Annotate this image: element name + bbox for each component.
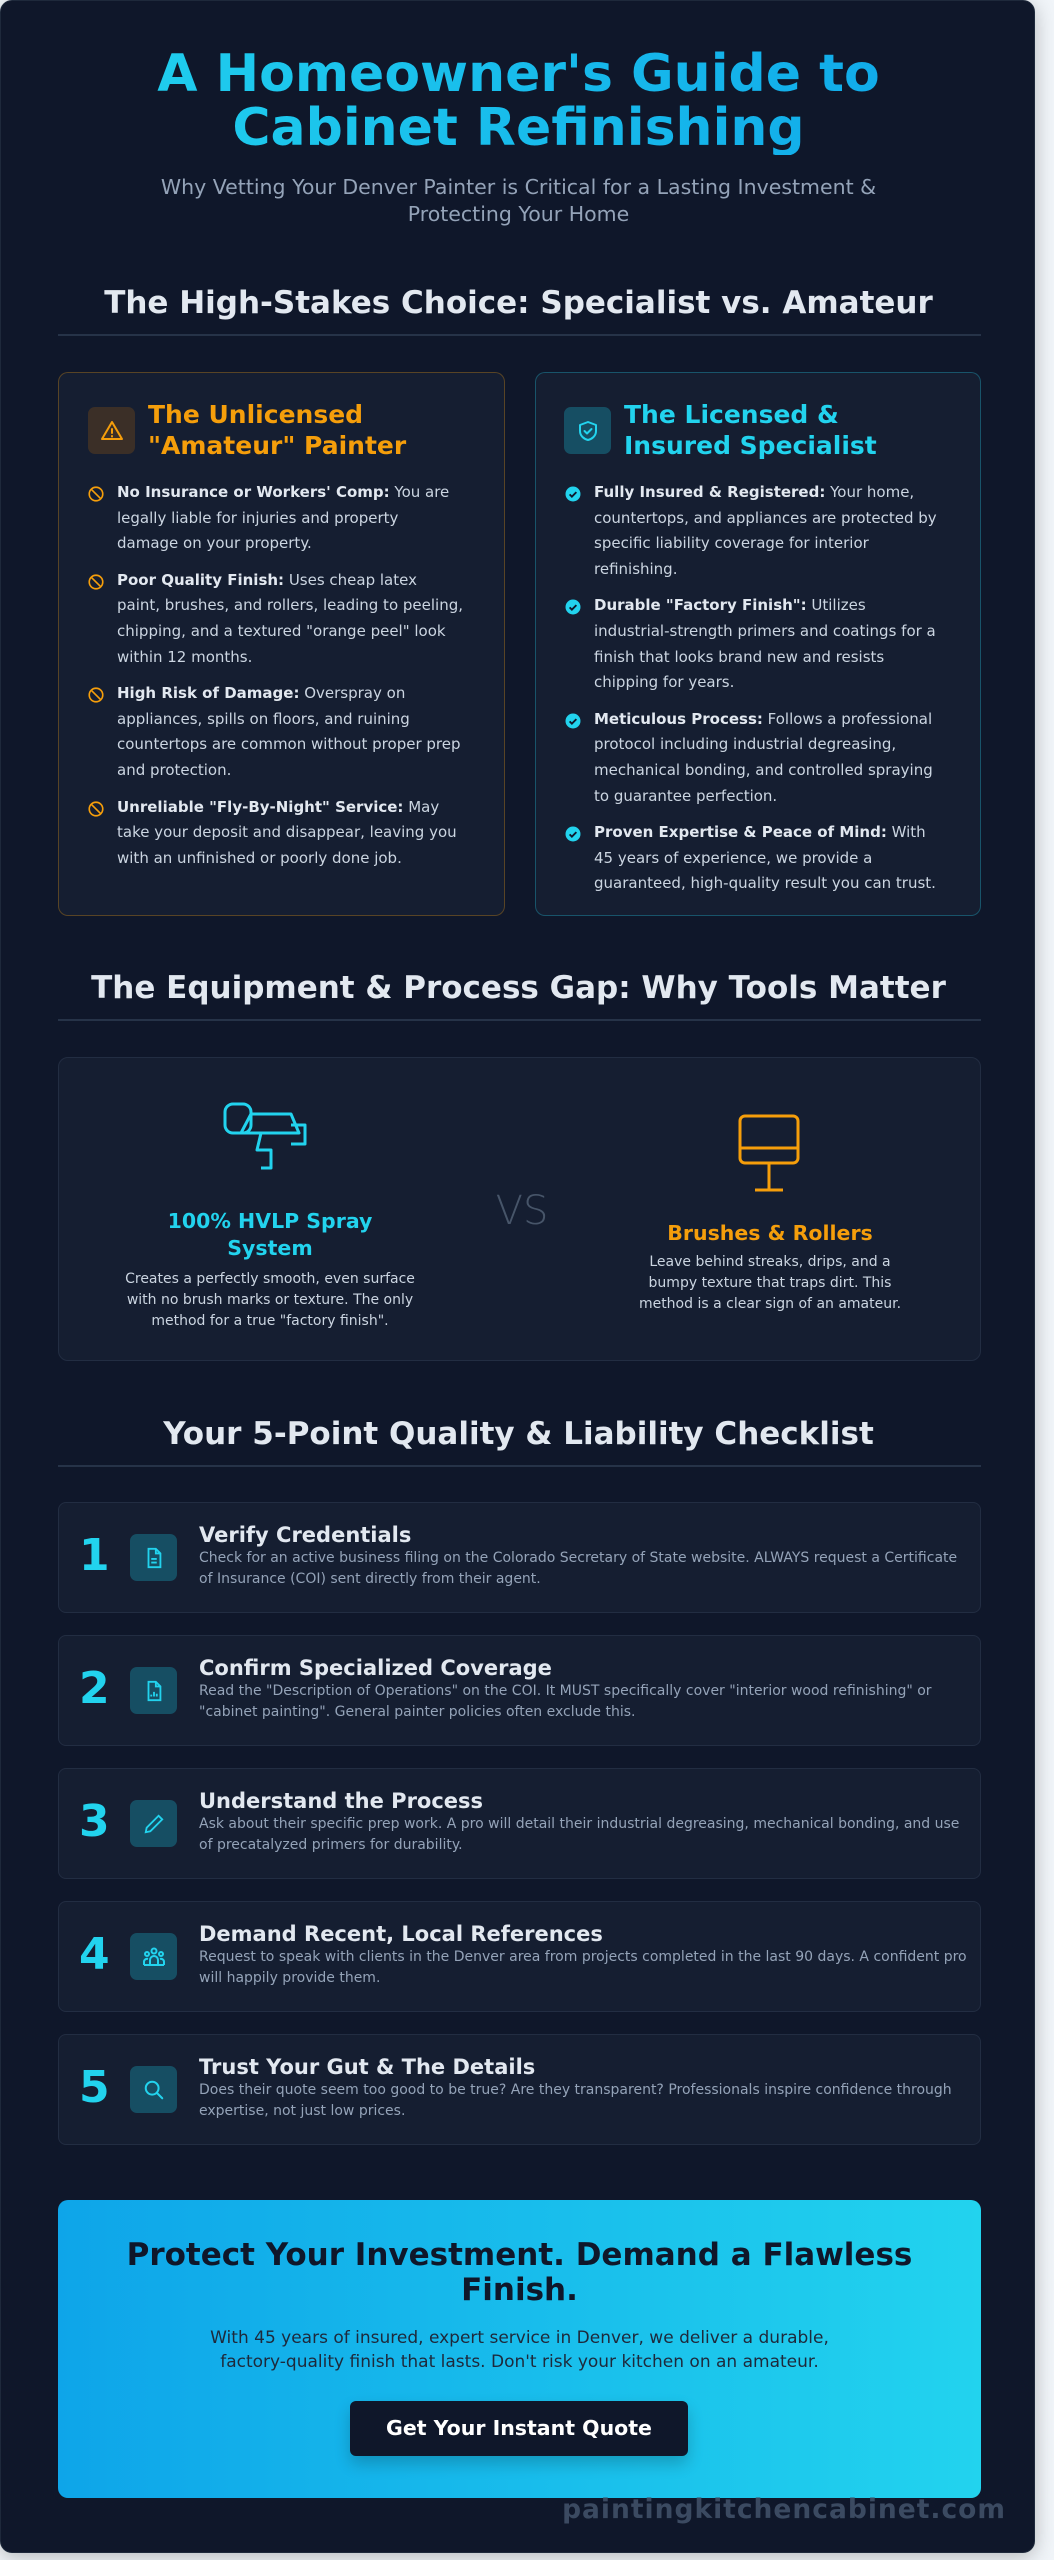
checklist item 3 bbox=[58, 1768, 981, 1879]
list: specialist benefits: finish that looks brand new and resists bbox=[594, 648, 884, 666]
heading: specialist bbox=[624, 400, 877, 460]
checklist item 5: Trust Your Gut & The Details bbox=[199, 2055, 535, 2079]
icon: brush bbox=[738, 1114, 800, 1192]
checklist item 4 bbox=[58, 1901, 981, 2012]
list: specialist benefits: industrial-strength primers and coatings for a bbox=[594, 622, 936, 640]
checklist item 2: 2 bbox=[79, 1663, 110, 1714]
CTA text: With 45 years of insured, expert service in Denver, we deliver a durable, factory-quality finish that lasts. Don't risk your kitchen on an amateur. bbox=[210, 2328, 829, 2372]
icon: people bbox=[130, 1933, 177, 1980]
list: specialist benefits: guaranteed, high-quality result you can trust. bbox=[594, 874, 936, 892]
text: brushes: Leave behind streaks, drips, and a bumpy texture that traps dirt. This method is a clear sign of an amateur. bbox=[639, 1254, 901, 1312]
list: specialist benefits: Fully Insured & Registered: Your home, bbox=[594, 483, 914, 501]
list: specialist benefits: specific liability coverage for interior bbox=[594, 534, 869, 552]
icon: search bbox=[130, 2066, 177, 2113]
checklist item 3: Ask about their specific prep work. A pro will detail their industrial degreasing, mechanical bonding, and use of precatalyzed primers for durability. bbox=[199, 1816, 959, 1853]
CTA heading: Protect Your Investment. Demand a Flawless Finish. bbox=[127, 2237, 912, 2308]
heading: checklist: Your 5-Point Quality & Liability Checklist bbox=[163, 1416, 874, 1452]
list: specialist benefits: refinishing. bbox=[594, 560, 677, 578]
text: brushes: Brushes & Rollers bbox=[667, 1221, 873, 1245]
list: amateur risks: High Risk of Damage: Overspray on appliances, spills on floors, and ruining countertops are common without proper prep and protection. bbox=[117, 684, 460, 779]
heading: specialist: The Licensed & bbox=[624, 400, 839, 429]
checklist item 1 bbox=[58, 1502, 981, 1613]
heading: high-stakes choice: The High-Stakes Choice: Specialist vs. Amateur bbox=[104, 285, 933, 321]
icon: shield bbox=[564, 407, 611, 454]
title: A Homeowner's Guide to bbox=[157, 44, 880, 104]
icon: warning bbox=[88, 407, 135, 454]
checklist item 1: Verify Credentials bbox=[199, 1523, 411, 1547]
checklist item 5: Does their quote seem too good to be true? Are they transparent? Professionals inspire confidence through expertise, not just low prices. bbox=[199, 2082, 952, 2119]
heading: amateur bbox=[148, 400, 406, 460]
CTA button bbox=[350, 2401, 688, 2456]
heading: amateur: "Amateur" Painter bbox=[148, 431, 406, 460]
text: spray system: Creates a perfectly smooth, even surface with no brush marks or texture. The only method for a true "factory finish". bbox=[125, 1271, 415, 1329]
subtitle: Why Vetting Your Denver Painter is Critical for a Lasting Investment & Protecting Your Home bbox=[161, 175, 876, 226]
text: spray system: 100% HVLP Spray bbox=[168, 1209, 372, 1233]
list: specialist benefits: Durable "Factory Finish": Utilizes bbox=[594, 596, 866, 614]
title bbox=[1, 47, 1036, 155]
list: amateur risks: Unreliable "Fly-By-Night" Service: May take your deposit and disappear, leaving you with an unfinished or poorly done job. bbox=[117, 798, 457, 867]
checklist item 4: 4 bbox=[79, 1929, 110, 1980]
title: Cabinet Refinishing bbox=[232, 98, 805, 158]
checklist item 3: Understand the Process bbox=[199, 1789, 483, 1813]
list: amateur risks: Poor Quality Finish: Uses cheap latex paint, brushes, and rollers, leading to peeling, chipping, and a textured "orange peel" look within 12 months. bbox=[117, 571, 463, 666]
checklist item 4: Request to speak with clients in the Denver area from projects completed in the last 90 days. A confident pro will happily provide them. bbox=[199, 1949, 967, 1986]
footer watermark: paintingkitchencabinet.com bbox=[562, 2494, 1006, 2525]
icon: pencil bbox=[130, 1800, 177, 1847]
list: specialist benefits bbox=[566, 483, 937, 892]
checklist item 5 bbox=[58, 2034, 981, 2145]
list: specialist benefits: protocol including industrial degreasing, bbox=[594, 735, 896, 753]
checklist item 1: 1 bbox=[79, 1530, 110, 1581]
list: specialist benefits: mechanical bonding, and controlled spraying bbox=[594, 761, 933, 779]
heading: equipment gap: The Equipment & Process Gap: Why Tools Matter bbox=[91, 970, 946, 1006]
list: specialist benefits: to guarantee perfection. bbox=[594, 787, 777, 805]
checklist item 2 bbox=[58, 1635, 981, 1746]
checklist item 2: Read the "Description of Operations" on the COI. It MUST specifically cover "interior wood refinishing" or "cabinet painting". General painter policies often exclude this. bbox=[199, 1683, 932, 1720]
CTA panel bbox=[58, 2200, 981, 2498]
icon: document bbox=[130, 1534, 177, 1581]
panel: equipment bbox=[58, 1057, 981, 1361]
heading: specialist: Insured Specialist bbox=[624, 431, 877, 460]
checklist item 1: Check for an active business filing on the Colorado Secretary of State website. ALWAYS request a Certificate of Insurance (COI) sent directly from their agent. bbox=[199, 1550, 957, 1587]
icon: spray gun bbox=[224, 1102, 306, 1170]
panel: specialist bbox=[535, 372, 981, 916]
icon: chart document bbox=[130, 1667, 177, 1714]
checklist item 5: 5 bbox=[79, 2062, 110, 2113]
VS label: VS bbox=[496, 1188, 548, 1234]
checklist item 2: Confirm Specialized Coverage bbox=[199, 1656, 552, 1680]
text: brushes bbox=[639, 1221, 901, 1312]
list: specialist benefits: 45 years of experience, we provide a bbox=[594, 849, 872, 867]
list: amateur risks bbox=[88, 483, 463, 867]
list: specialist benefits: countertops, and appliances are protected by bbox=[594, 509, 937, 527]
list: amateur risks: No Insurance or Workers' Comp: You are legally liable for injuries and property damage on your property. bbox=[117, 483, 449, 552]
list: specialist benefits: chipping for years. bbox=[594, 673, 734, 691]
CTA button: Get Your Instant Quote bbox=[386, 2416, 652, 2440]
heading: amateur: The Unlicensed bbox=[148, 400, 363, 429]
checklist item 3: 3 bbox=[79, 1796, 110, 1847]
text: spray system: System bbox=[227, 1236, 313, 1260]
list: specialist benefits: Proven Expertise & Peace of Mind: With bbox=[594, 823, 926, 841]
panel: amateur bbox=[58, 372, 505, 916]
text: spray system bbox=[125, 1209, 415, 1329]
list: specialist benefits: Meticulous Process: Follows a professional bbox=[594, 710, 932, 728]
checklist item 4: Demand Recent, Local References bbox=[199, 1922, 603, 1946]
